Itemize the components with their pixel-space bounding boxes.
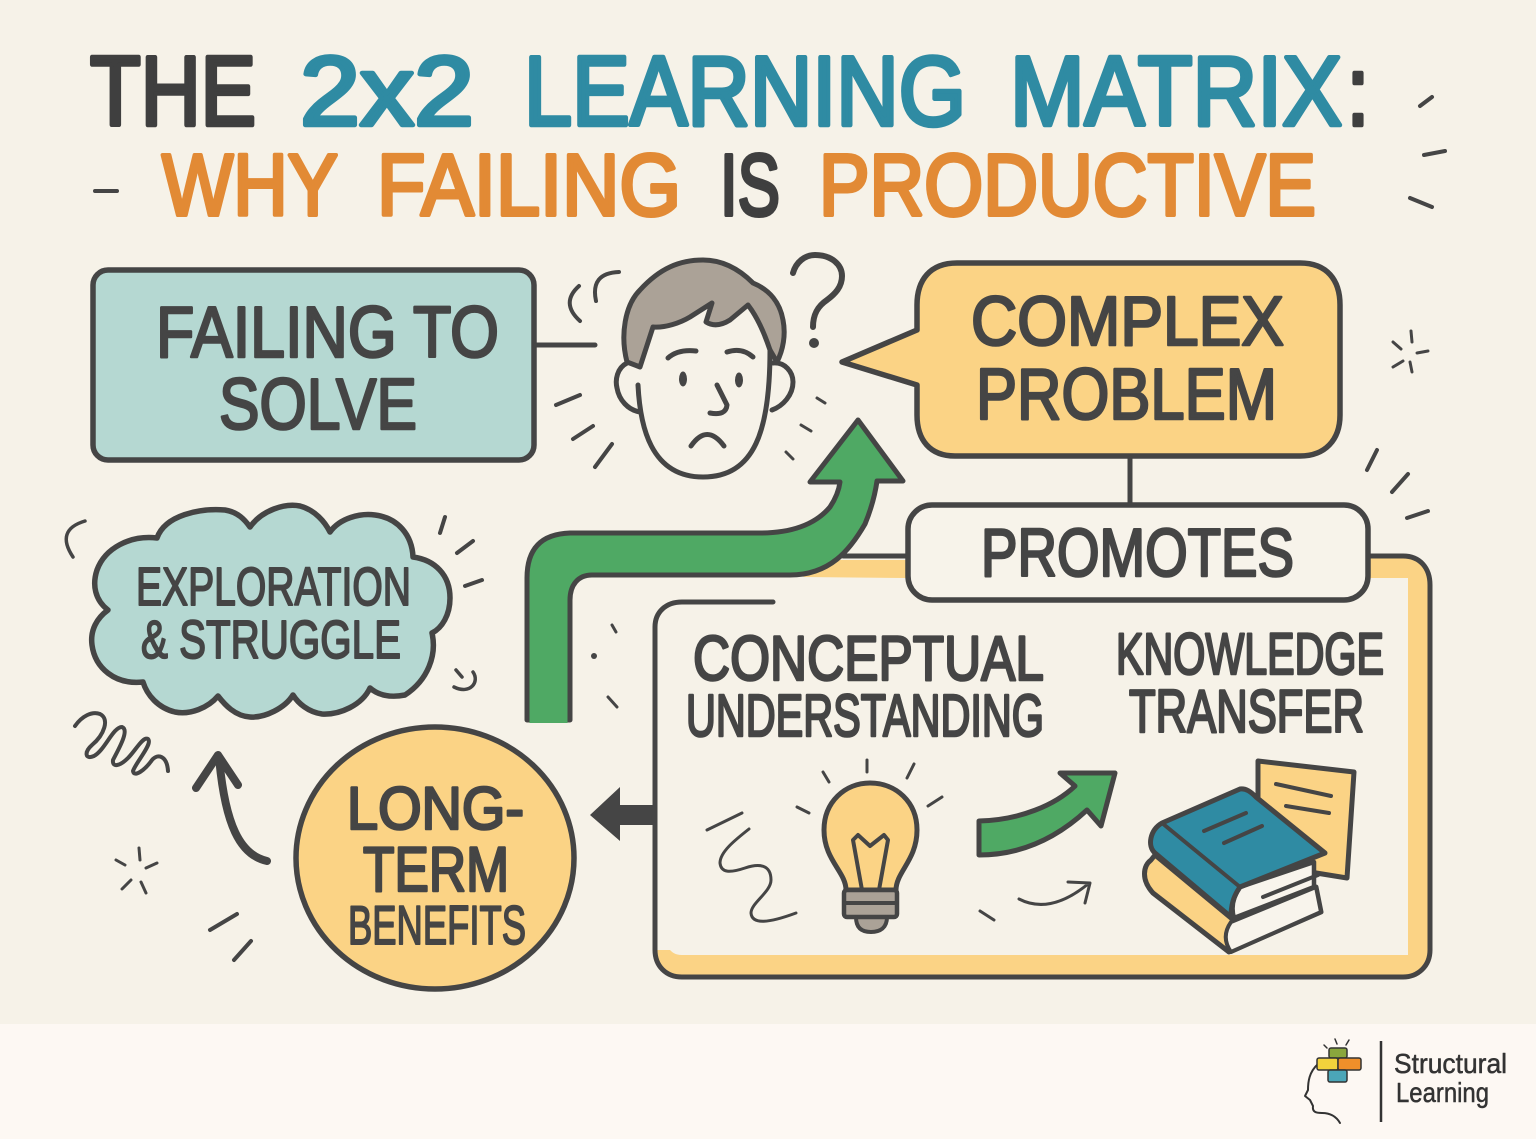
title: 2x2: [300, 36, 474, 146]
title: FAILING: [377, 137, 681, 234]
title: WHY: [162, 137, 338, 234]
arrow base cover: [530, 717, 568, 723]
title: [90, 36, 1369, 234]
panel: failing to solve: [93, 270, 534, 460]
connector: failing to head: [536, 342, 595, 348]
title: :: [1347, 36, 1369, 146]
panel: exploration and struggle cloud: & STRUGGLE: [141, 610, 401, 670]
panel: failing to solve: FAILING TO: [156, 293, 499, 373]
icon: books and paper: [1144, 761, 1354, 952]
arrow: panel to benefits: [590, 787, 655, 841]
panel: complex problem speech bubble: [842, 263, 1340, 456]
title: LEARNING: [524, 36, 966, 146]
circle: long-term benefits: BENEFITS: [348, 894, 526, 956]
title: MATRIX: [1010, 36, 1342, 146]
arrow: small green arrow: [979, 773, 1115, 855]
marks beside green arrow: [591, 625, 617, 707]
icon: confused head: [556, 255, 842, 477]
panel: benefits container: TRANSFER: [1129, 678, 1364, 745]
icon: squiggle spring: [75, 713, 168, 774]
title: THE: [90, 36, 256, 146]
panel: failing to solve: SOLVE: [219, 365, 417, 445]
logo: structural learning: [1305, 1039, 1507, 1123]
title: IS: [720, 137, 780, 234]
icon: light bulb: [797, 760, 942, 932]
doodles near benefits: [116, 848, 251, 960]
panel: complex problem speech bubble: COMPLEX: [971, 282, 1284, 360]
arrow: big green up arrow: [527, 420, 903, 720]
logo: structural learning: Learning: [1396, 1077, 1489, 1108]
panel: benefits container: UNDERSTANDING: [686, 683, 1044, 749]
panel: promotes label: PROMOTES: [981, 515, 1294, 591]
connector: problem to promotes: [1128, 458, 1132, 503]
panel: benefits container: [655, 556, 1430, 977]
marks around complex problem: [1367, 331, 1428, 518]
circle: long-term benefits: [296, 727, 574, 989]
arrow: thin curved arrow: [980, 882, 1090, 920]
panel: complex problem speech bubble: PROBLEM: [976, 355, 1277, 435]
arrow: benefits to exploration: [196, 755, 267, 861]
title: PRODUCTIVE: [819, 137, 1316, 234]
panel: benefits container: KNOWLEDGE: [1116, 622, 1384, 687]
circle: long-term benefits: LONG-: [347, 775, 524, 842]
cloud doodles: [66, 517, 482, 689]
logo: structural learning: Structural: [1394, 1048, 1507, 1079]
panel: exploration and struggle cloud: EXPLORATION: [136, 557, 411, 617]
title doodle marks: [95, 97, 1445, 207]
panel: exploration and struggle cloud: [92, 505, 450, 717]
panel: promotes label: [908, 505, 1368, 600]
icon: scribble: [707, 813, 796, 921]
circle: long-term benefits: TERM: [363, 835, 509, 905]
panel: benefits container: CONCEPTUAL: [693, 624, 1044, 694]
